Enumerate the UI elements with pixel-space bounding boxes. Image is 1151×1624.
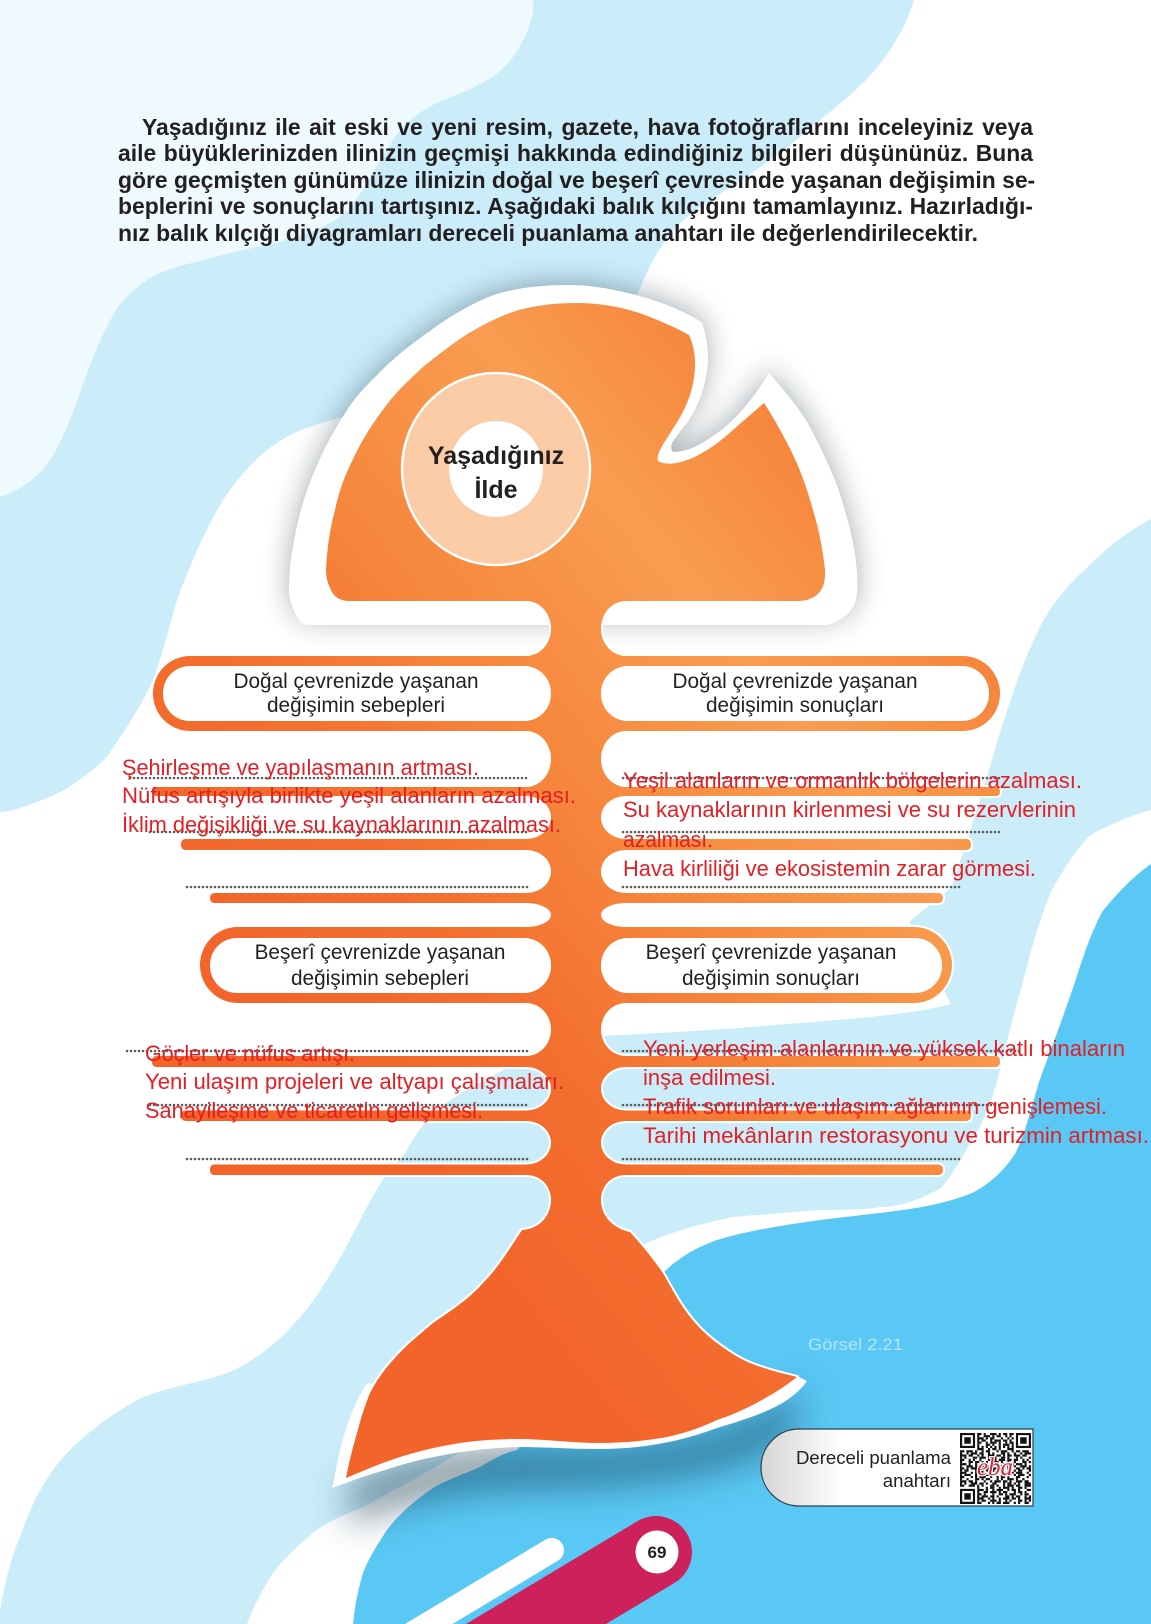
- panel: natural causes header: Doğal çevrenizde yaşanan: [233, 670, 479, 693]
- answers: natural results: Yeşil alanların ve ormanlık bölgelerin azalması.: [623, 768, 1082, 793]
- panel: human results header: değişimin sonuçları: [682, 967, 860, 990]
- icon: eba logo: eba: [977, 1454, 1013, 1481]
- page number band: [466, 1516, 692, 1624]
- background: pale top-left wave: [0, 0, 533, 497]
- panel: human results header: Beşerî çevrenizde yaşanan: [646, 941, 896, 964]
- background: deep blue wave: [353, 864, 1151, 1624]
- fish bones: [152, 303, 1000, 1478]
- callout: rubric with QR code: Dereceli puanlama: [796, 1447, 952, 1468]
- answers: natural results: Hava kirliliği ve ekosistemin zarar görmesi.: [623, 856, 1036, 881]
- answers: natural causes: Şehirleşme ve yapılaşmanın artması.: [122, 755, 479, 780]
- tail white halo: [332, 1376, 807, 1488]
- head circle label: [402, 373, 590, 565]
- panel: natural causes header: değişimin sebepleri: [267, 694, 445, 717]
- panel: human results header: [601, 938, 942, 993]
- answers: human causes: Sanayileşme ve ticaretin gelişmesi.: [145, 1098, 483, 1123]
- head circle label: Yaşadığınız: [428, 442, 564, 470]
- answers: human results: Yeni yerleşim alanlarının ve yüksek katlı binaların: [643, 1036, 1125, 1061]
- answers: human results: Trafik sorunları ve ulaşım ağlarının genişlemesi.: [643, 1094, 1107, 1119]
- callout: rubric with QR code: anahtarı: [883, 1470, 951, 1491]
- answers: human results: Tarihi mekânların restorasyonu ve turizmin artması.: [643, 1123, 1149, 1148]
- answers: natural results: [623, 768, 1082, 881]
- tail shadow: [345, 1385, 805, 1525]
- answers: natural causes: Nüfus artışıyla birlikte yeşil alanların azalması.: [122, 783, 576, 808]
- instruction paragraph: nız balık kılçığı diyagramları dereceli puanlama anahtarı ile değerlendirilecektir.: [118, 220, 978, 246]
- answers: human causes: Yeni ulaşım projeleri ve altyapı çalışmaları.: [145, 1069, 564, 1094]
- instruction paragraph: göre geçmişten günümüze ilinizin doğal ve beşerî çevresinde yaşanan değişimin se-: [118, 167, 1035, 193]
- answers: natural causes: İklim değişikliği ve su kaynaklarının azalması.: [122, 812, 561, 837]
- head circle label: İlde: [474, 476, 518, 504]
- background: light blue lower wave: [0, 519, 1151, 1624]
- panel: human causes header: değişimin sebepleri: [291, 967, 469, 990]
- background: light blue upper wave: [0, 0, 914, 812]
- fish skeleton: [152, 303, 1000, 1478]
- answers: natural results: azalması.: [623, 827, 713, 852]
- answers: human causes: Göçler ve nüfus artışı.: [145, 1041, 355, 1066]
- instruction paragraph: beplerini ve sonuçlarını tartışınız. Aşağıdaki balık kılçığını tamamlayınız. Hazırladığı-: [118, 193, 1033, 219]
- decorative white pill: [405, 1538, 564, 1624]
- page number band: 69: [648, 1543, 666, 1562]
- panel: human causes header: [210, 938, 551, 993]
- figure caption: Görsel 2.21: [808, 1335, 903, 1354]
- panel: natural results header: [601, 666, 989, 721]
- panel: natural results header: değişimin sonuçları: [706, 694, 884, 717]
- icon: QR code: [960, 1433, 1031, 1504]
- instruction paragraph: [118, 114, 1035, 246]
- instruction paragraph: aile büyüklerinizden ilinizin geçmişi hakkında edindiğiniz bilgileri düşününüz. Buna: [118, 140, 1033, 166]
- answers: human results: [643, 1036, 1149, 1148]
- answers: natural results: Su kaynaklarının kirlenmesi ve su rezervlerinin: [623, 797, 1076, 822]
- head white halo: [289, 285, 857, 625]
- callout: rubric with QR code: [761, 1429, 1033, 1506]
- panel: natural causes header: [163, 666, 551, 721]
- head shadow: [289, 282, 857, 620]
- answers: natural causes: [122, 755, 576, 837]
- panel: human causes header: Beşerî çevrenizde yaşanan: [255, 941, 505, 964]
- panel: natural results header: Doğal çevrenizde yaşanan: [672, 670, 918, 693]
- answers: human causes: [145, 1041, 564, 1123]
- instruction paragraph: Yaşadığınız ile ait eski ve yeni resim, gazete, hava fotoğraflarını inceleyiniz veya: [142, 114, 1033, 140]
- answers: human results: inşa edilmesi.: [643, 1065, 776, 1090]
